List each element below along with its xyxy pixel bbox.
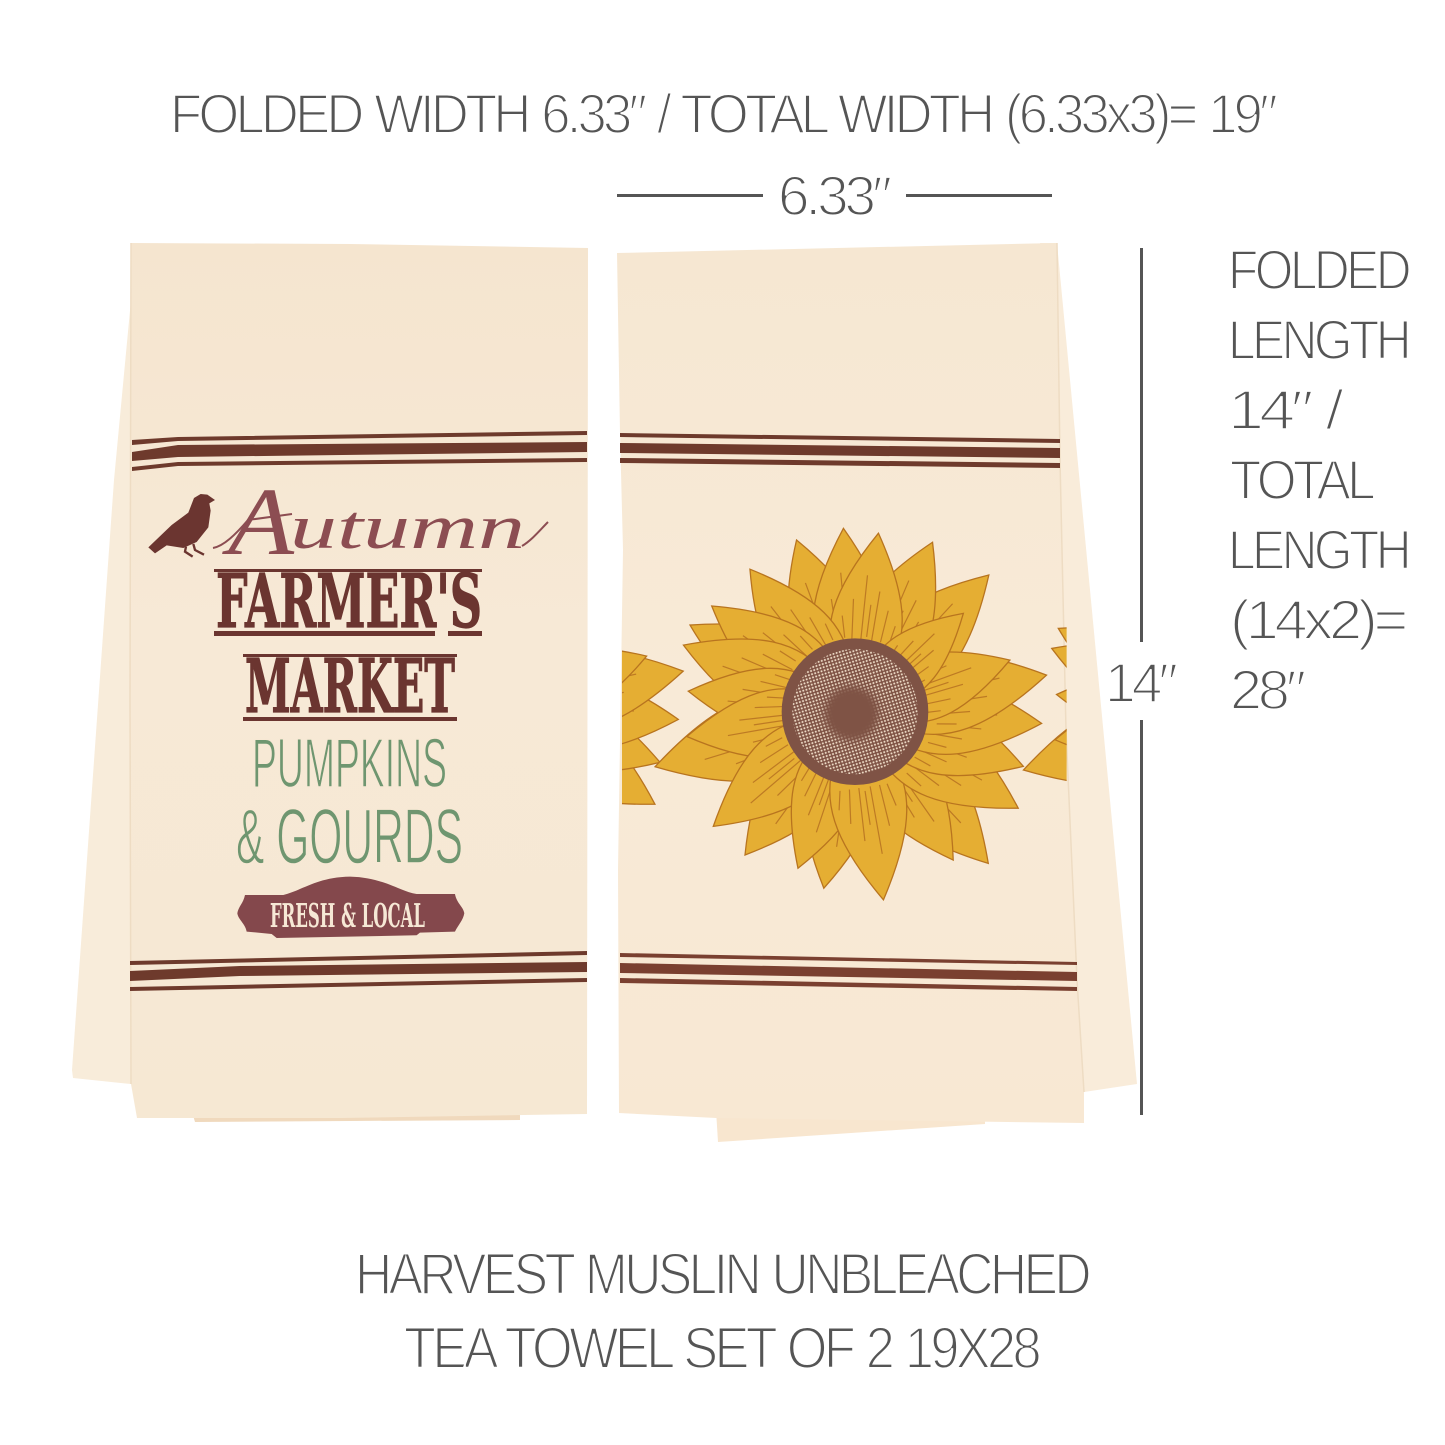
text: folded length and total length: LENGTH xyxy=(1228,518,1408,581)
width dimension: 6.33 inches xyxy=(617,164,1052,227)
text: folded length and total length: LENGTH xyxy=(1228,308,1408,371)
badge: fresh and local: FRESH & LOCAL xyxy=(270,896,425,935)
panel: right towel xyxy=(617,243,1137,1142)
lower stripes xyxy=(130,951,587,991)
icon: crow xyxy=(148,494,215,557)
sunflower seed head xyxy=(782,638,928,785)
text: Farmer's with rules: FARMER'S xyxy=(216,559,482,645)
fold edge xyxy=(1057,243,1084,1092)
towel right flap xyxy=(1040,243,1137,1092)
text: folded length and total length: 14″ / xyxy=(1228,378,1344,441)
text: Autumn xyxy=(213,468,548,575)
towel back flap xyxy=(72,300,140,1084)
towel front panel xyxy=(130,243,588,1118)
text: Farmer's with rules xyxy=(214,559,482,645)
text: Autumn: utumn xyxy=(290,494,525,562)
towel back layer xyxy=(192,1112,520,1122)
fold edge xyxy=(130,243,131,1084)
text: folded length and total length: TOTAL xyxy=(1230,448,1375,511)
text: folded length and total length xyxy=(1228,238,1409,721)
text: Market with rules: MARKET xyxy=(245,644,455,730)
caption: product name: HARVEST MUSLIN UNBLEACHED xyxy=(355,1242,1090,1307)
text: folded length and total length: FOLDED xyxy=(1228,238,1409,301)
partial sunflower right xyxy=(1022,627,1067,781)
partial sunflower left xyxy=(622,650,684,805)
height dimension: 14 inches xyxy=(1105,248,1177,1115)
title: folded and total width: FOLDED WIDTH 6.33″ / TOTAL WIDTH (6.33x3)= 19″ xyxy=(170,82,1277,145)
text: folded length and total length: (14x2)= xyxy=(1230,588,1405,651)
text: and Gourds: & GOURDS xyxy=(236,792,463,880)
height dimension: 14 inches: 14″ xyxy=(1105,651,1177,714)
caption: product name xyxy=(355,1242,1090,1381)
upper stripes xyxy=(620,433,1060,468)
badge: fresh and local xyxy=(237,877,464,938)
main sunflower petals xyxy=(644,526,1054,905)
lower stripes xyxy=(620,953,1077,991)
text: Autumn: A xyxy=(221,468,294,575)
towel front panel xyxy=(617,243,1084,1123)
upper stripes xyxy=(132,431,587,471)
caption: product name: TEA TOWEL SET OF 2 19X28 xyxy=(404,1316,1040,1381)
text: Market with rules xyxy=(243,644,457,730)
towel under flap xyxy=(716,1110,985,1142)
illustration: sunflowers xyxy=(622,527,1067,901)
width dimension: 6.33 inches: 6.33″ xyxy=(778,164,891,227)
text: Pumpkins: PUMPKINS xyxy=(252,724,447,802)
text: folded length and total length: 28″ xyxy=(1230,658,1305,721)
panel: left towel xyxy=(72,243,588,1122)
